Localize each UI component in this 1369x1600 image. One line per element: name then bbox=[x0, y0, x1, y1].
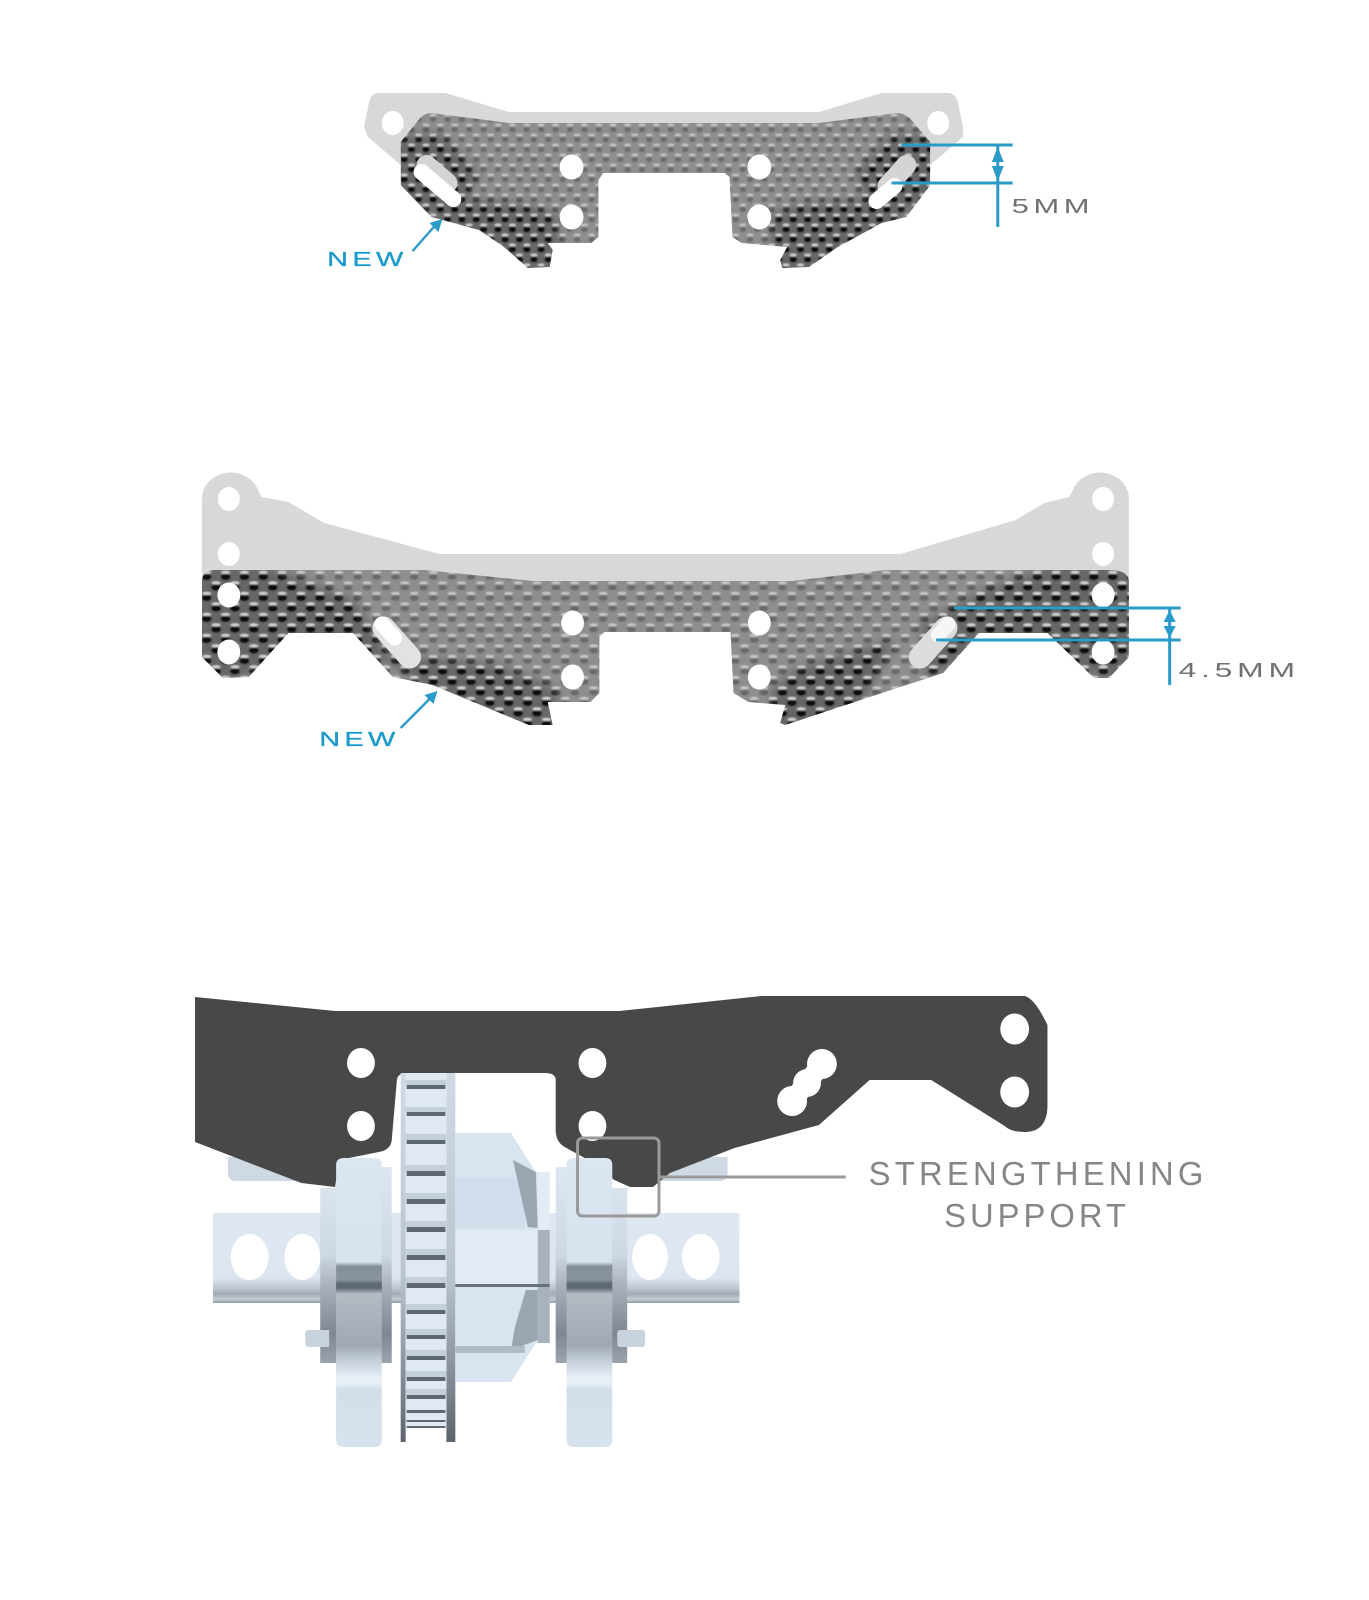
grey plate mounting holes bbox=[382, 111, 949, 135]
arrow new bbox=[401, 691, 437, 728]
left bearing carrier bbox=[329, 1158, 392, 1447]
right bearing carrier bbox=[556, 1158, 612, 1447]
label new: NEW bbox=[327, 249, 408, 271]
label strengthening support: SUPPORT bbox=[944, 1197, 1126, 1234]
right carrier backing bbox=[597, 1188, 627, 1363]
panel: differential with strengthening support bbox=[195, 996, 1203, 1447]
spur gear bbox=[401, 1073, 455, 1442]
dimension 5mm bbox=[891, 145, 1013, 227]
grey original plate behind bbox=[202, 473, 1129, 590]
panel: top narrow plate with 5mm offset bbox=[327, 93, 1094, 275]
label 4.5mm: 4.5MM bbox=[1179, 660, 1300, 682]
right slot bbox=[920, 624, 948, 657]
grey original plate behind bbox=[364, 93, 963, 165]
rear brackets behind plate bbox=[228, 1157, 728, 1181]
callout box bbox=[578, 1138, 659, 1216]
grey plate mounting holes bbox=[218, 487, 1114, 566]
carbon fibre plate bbox=[202, 570, 1129, 725]
left carrier backing bbox=[320, 1188, 344, 1363]
pins bbox=[305, 1330, 645, 1347]
right slot bbox=[877, 165, 906, 201]
differential body bbox=[455, 1133, 550, 1382]
axle bbox=[213, 1213, 739, 1303]
left slot bbox=[382, 624, 410, 657]
carbon plate holes bbox=[560, 154, 771, 230]
dark support plate bbox=[195, 996, 1047, 1187]
label new: NEW bbox=[319, 729, 400, 751]
left slot bbox=[422, 165, 453, 199]
carbon fibre plate bbox=[400, 113, 930, 268]
callout leader line bbox=[659, 1176, 846, 1178]
panel: middle wide plate with 4.5mm offset bbox=[195, 473, 1300, 751]
label strengthening support bbox=[869, 1155, 1203, 1234]
label 5mm: 5MM bbox=[1012, 196, 1094, 218]
carbon plate holes bbox=[217, 582, 1115, 690]
label strengthening support: STRENGTHENING bbox=[869, 1155, 1203, 1192]
arrow new bbox=[413, 219, 442, 251]
dimension 4.5mm bbox=[936, 608, 1181, 685]
